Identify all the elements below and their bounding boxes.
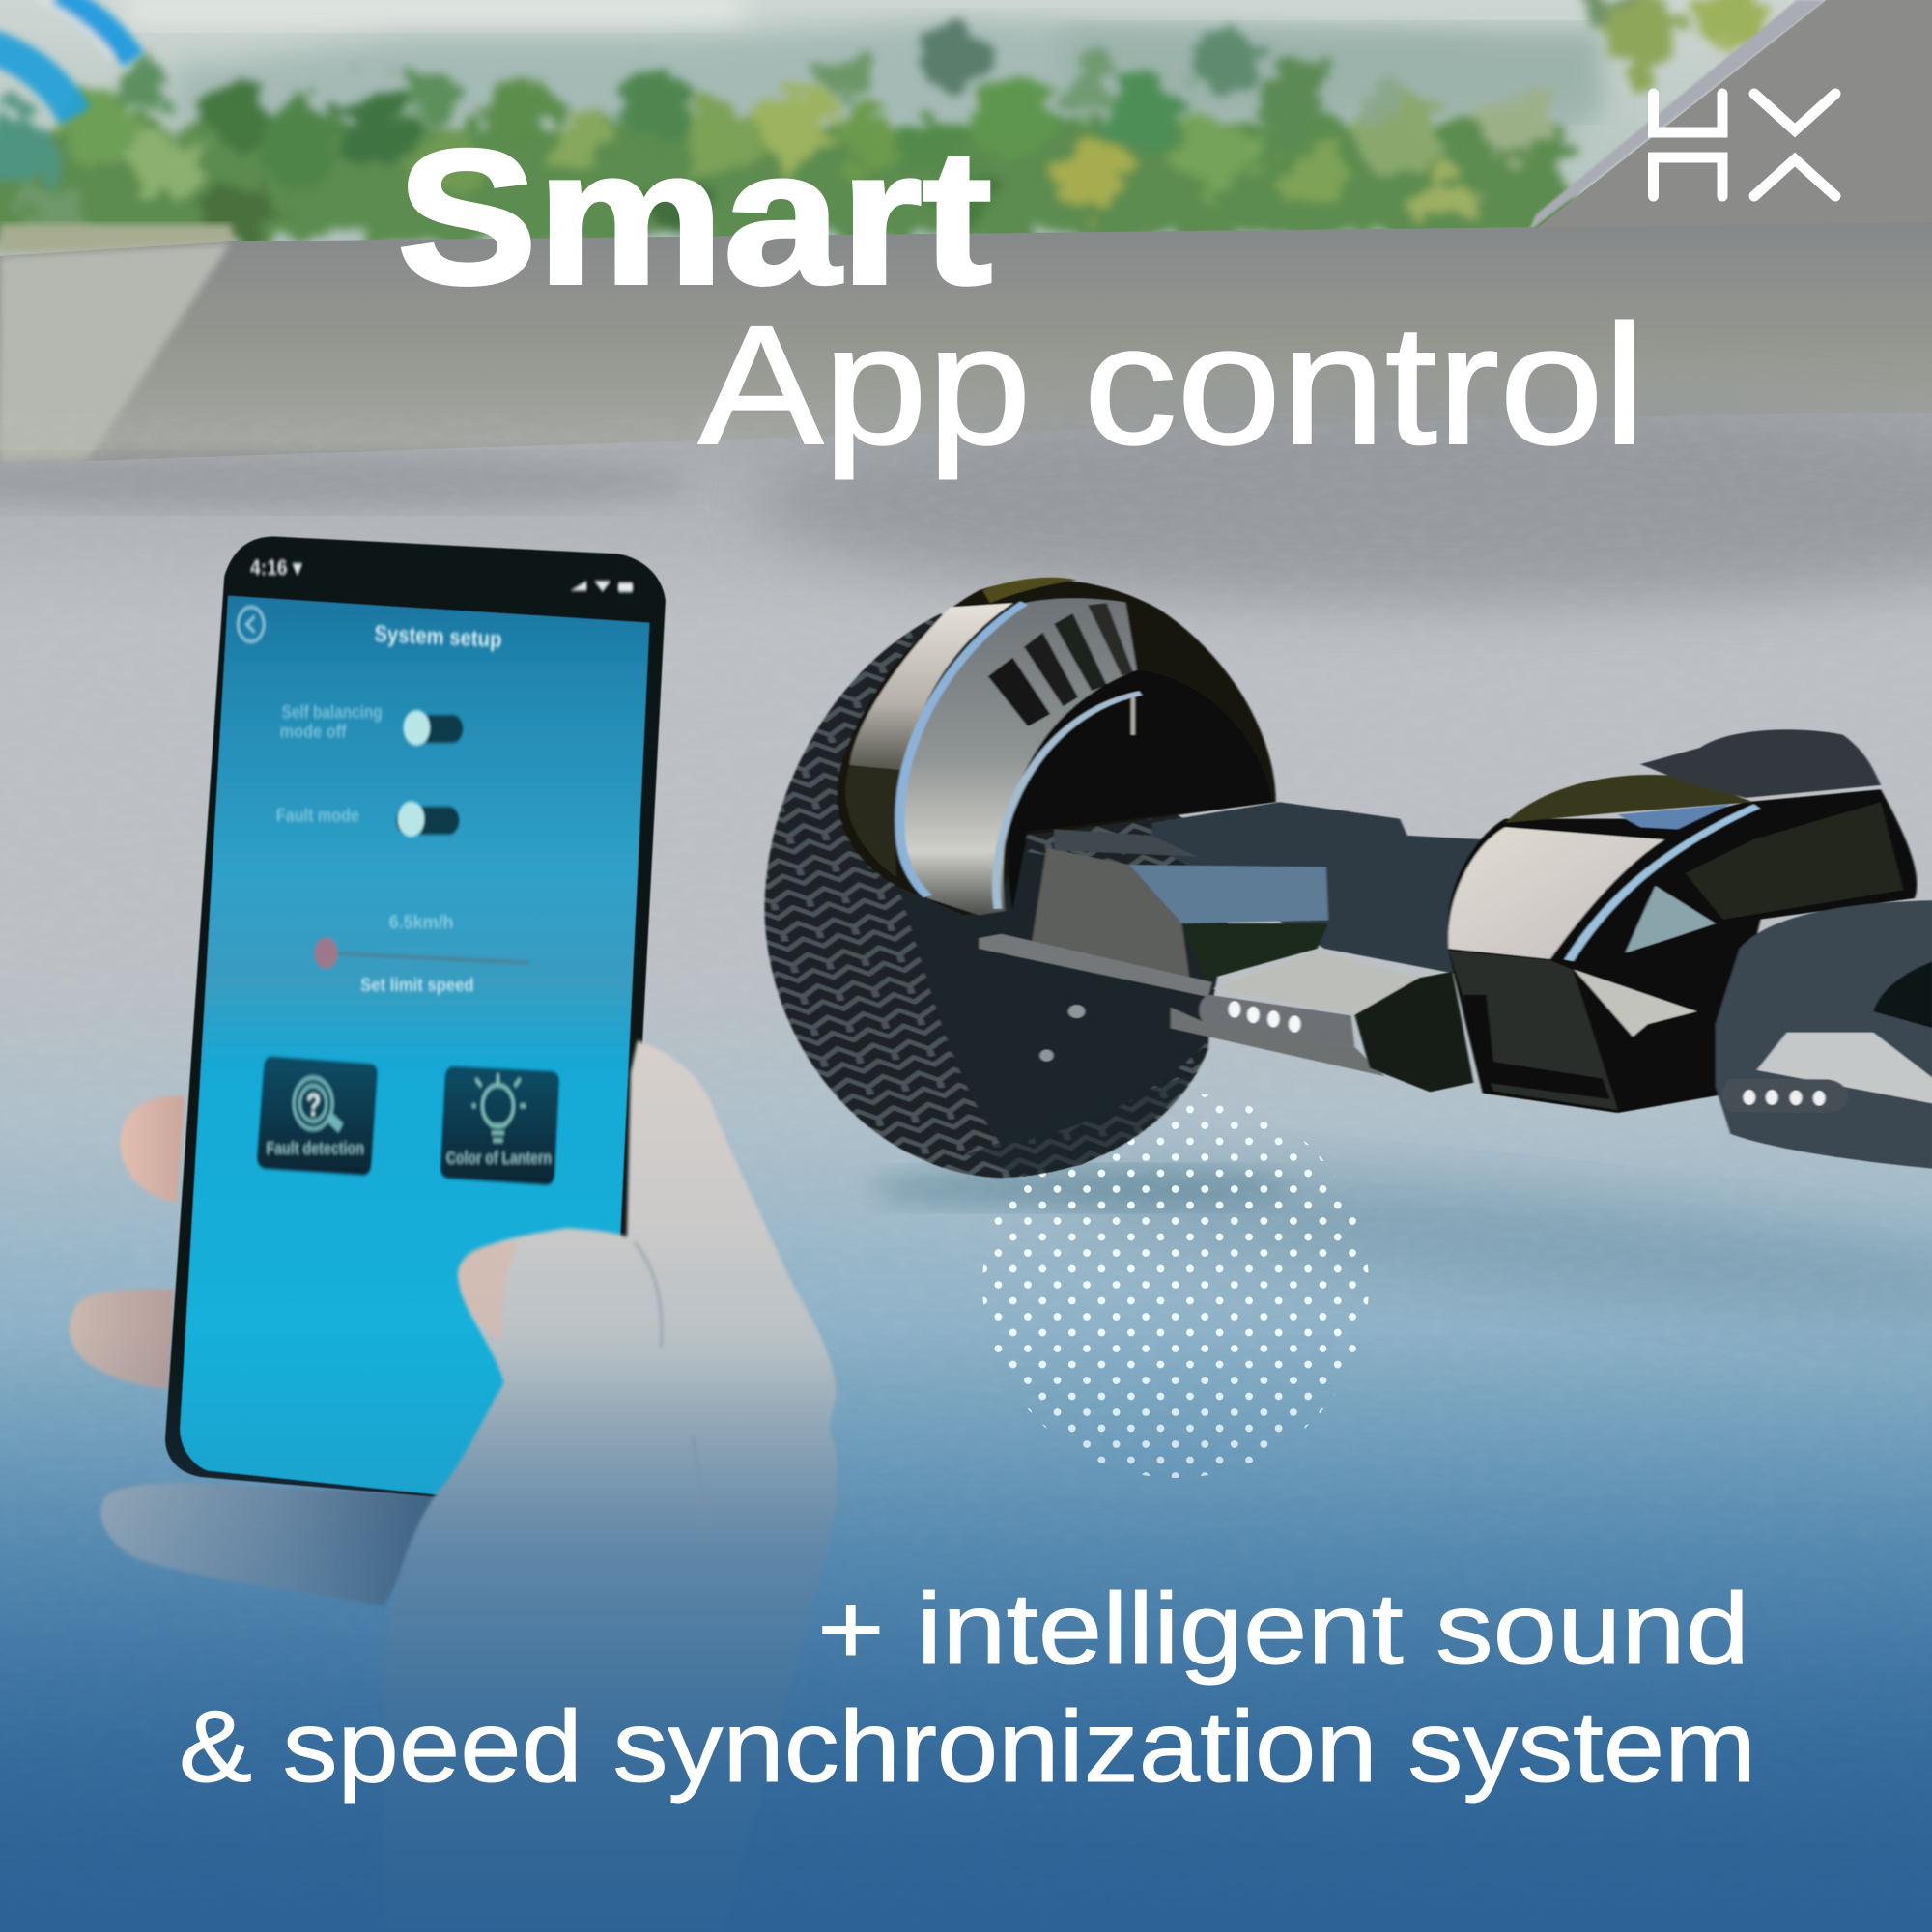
status bar: 4:16 ▾ <box>250 556 303 580</box>
status bar <box>250 556 633 592</box>
screen <box>180 596 649 1513</box>
background scene: tree line <box>0 0 1764 242</box>
setting rows <box>276 700 383 826</box>
middle finger <box>70 1290 174 1389</box>
speed slider: 6.5km/h <box>389 911 454 933</box>
right diagonal wall <box>1526 0 1932 290</box>
right fender <box>1448 775 1917 1113</box>
dark block under deck <box>1354 972 1473 1092</box>
fault detection button <box>257 1057 377 1175</box>
toggle 1 <box>404 710 463 746</box>
foot deck front <box>1032 829 1328 980</box>
setting rows: mode off <box>280 721 347 742</box>
title line 2: App control <box>698 291 1645 480</box>
setting rows: Self balancing <box>282 700 383 723</box>
index finger <box>120 1095 185 1203</box>
smartphone <box>165 537 666 1513</box>
subtitle line 2: & speed synchronization system <box>179 1690 1756 1804</box>
side rail <box>979 934 1212 997</box>
fault detection button: ? <box>306 1088 321 1123</box>
background scene: sky and hills <box>0 0 1932 290</box>
ground <box>0 401 1932 1932</box>
platform body <box>1151 802 1487 974</box>
speed slider <box>314 911 529 995</box>
title line 1: Smart <box>397 110 992 324</box>
icon: light bulb <box>472 1074 526 1141</box>
grass strip at left of the wall <box>0 224 232 253</box>
phone body <box>165 537 666 1513</box>
fault detection button: Fault detection <box>267 1140 364 1158</box>
color of lantern button: Color of Lantern <box>446 1150 552 1168</box>
app screen contents <box>238 607 559 1184</box>
tire <box>765 613 1219 1178</box>
front light bar <box>1171 995 1385 1076</box>
wheel fender <box>837 578 1276 915</box>
blue arcs, top left <box>0 0 133 116</box>
hoverboard <box>765 578 1932 1178</box>
thumb tip <box>458 1243 517 1342</box>
title <box>397 110 1645 480</box>
top of right fender <box>1640 729 1881 798</box>
icon: magnifier <box>294 1078 341 1129</box>
hub rivets <box>1039 1005 1085 1062</box>
bottom blue fade <box>0 1333 1932 1932</box>
back button <box>238 607 264 641</box>
logo <box>1654 94 1835 196</box>
halftone dot circle <box>982 1092 1369 1478</box>
ring finger <box>100 1483 446 1606</box>
speed slider: Set limit speed <box>360 974 474 995</box>
hand behind the phone: fingers <box>70 1095 446 1606</box>
knuckle crease <box>635 1242 703 1529</box>
subtitle <box>179 1573 1756 1804</box>
color of lantern button <box>440 1066 559 1184</box>
setting rows: Fault mode <box>276 804 359 826</box>
system setup heading: System setup <box>374 621 502 652</box>
concrete wall <box>0 222 1932 464</box>
wheel inner sidewall <box>896 844 1235 1146</box>
step pad <box>1213 951 1419 1015</box>
toggle 2 <box>396 801 459 837</box>
rear platform <box>1716 900 1932 1169</box>
tire overlay that dims the dots <box>966 1072 1198 1177</box>
palm <box>384 1040 838 1932</box>
hand in front of the phone <box>384 1040 838 1932</box>
subtitle line 1: + intelligent sound <box>817 1573 1749 1686</box>
